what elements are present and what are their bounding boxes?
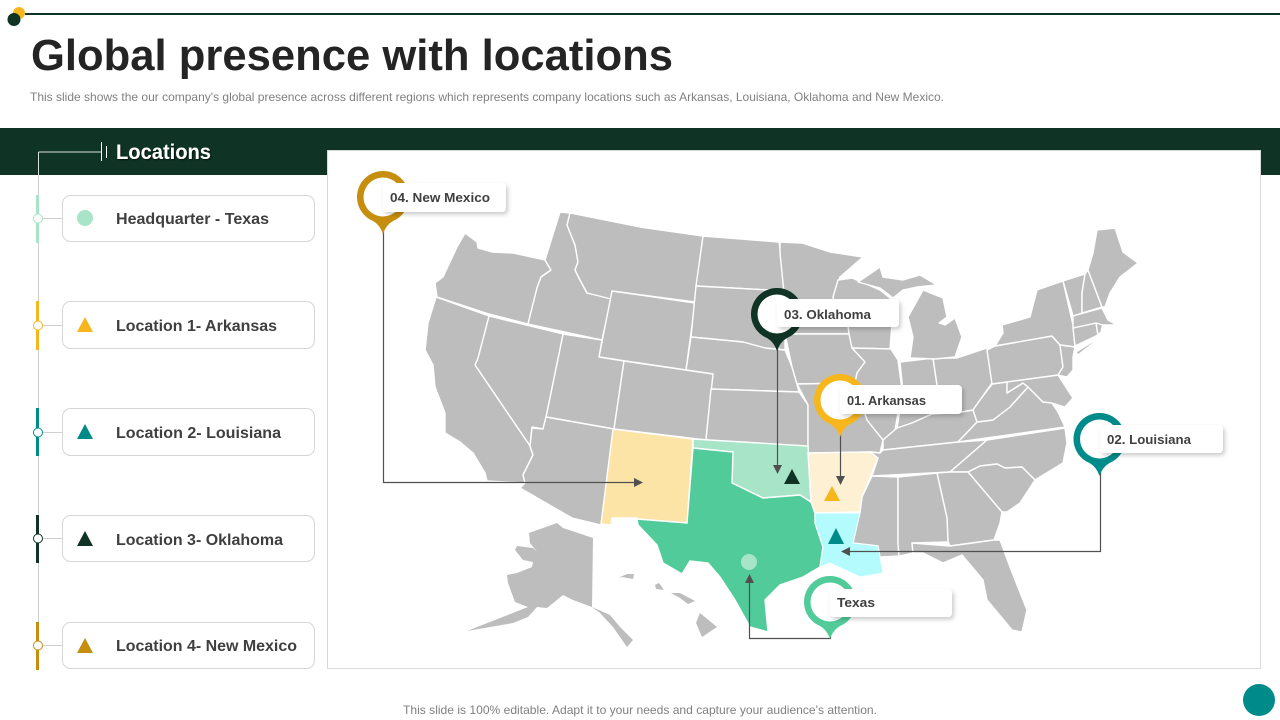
state: Louisiana [815, 513, 883, 577]
Tennessee [870, 440, 987, 476]
Hawaii [696, 613, 717, 637]
callout: Texas: Texas [837, 595, 875, 610]
arrow: Texas [745, 574, 830, 638]
marker: Louisiana triangle [828, 528, 844, 544]
legend heading: Locations [116, 141, 211, 164]
legend trunk line and bracket [38, 142, 106, 646]
state: Oklahoma [693, 439, 811, 502]
state: Texas [637, 448, 823, 632]
subtitle: This slide shows the our company's global presence across different regions which represents company locations such as Arkansas, Louisiana, Oklahoma and New Mexico. [30, 90, 944, 104]
title: Global presence with locations [31, 31, 673, 80]
legend item: Location 4 [34, 622, 314, 670]
WA and OR [435, 233, 551, 324]
callout: Texas [804, 576, 952, 639]
Alaska panhandle [592, 607, 633, 647]
arrow: Louisiana [841, 472, 1100, 556]
marker: Oklahoma triangle [784, 469, 800, 484]
corner circle [1243, 684, 1275, 716]
arrow: New Mexico [384, 230, 643, 487]
legend item: Location 2: Location 2- Louisiana [116, 425, 281, 442]
callout: 04 New Mexico: 04. New Mexico [390, 190, 490, 205]
top decoration: dots and rule [8, 7, 1280, 26]
footer note: This slide is 100% editable. Adapt it to your needs and capture your audience's attention. [403, 703, 877, 717]
legend item: Headquarter [34, 195, 314, 243]
state: New Mexico [601, 429, 693, 525]
US map [425, 212, 1138, 647]
legend item: Location 1 [34, 301, 314, 350]
callout: 01 Arkansas: 01. Arkansas [847, 393, 926, 408]
marker: Texas headquarter circle [741, 554, 757, 570]
callout: 03 Oklahoma: 03. Oklahoma [784, 307, 872, 322]
legend item: Location 3 [34, 515, 314, 563]
map panel [328, 150, 1260, 668]
callout: 01 Arkansas [814, 374, 962, 437]
arrow: Oklahoma [773, 345, 782, 474]
state: Arkansas [808, 452, 878, 513]
header band [0, 128, 1280, 175]
legend item: Location 4: Location 4- New Mexico [116, 638, 297, 655]
callout: 04 New Mexico [357, 171, 506, 234]
legend item: Location 1: Location 1- Arkansas [116, 318, 277, 335]
legend item: Location 2 [34, 408, 314, 456]
callout: 02 Louisiana: 02. Louisiana [1107, 432, 1192, 447]
callout: 03 Oklahoma [751, 288, 899, 351]
legend item: Location 3: Location 3- Oklahoma [116, 532, 283, 549]
arrow: Arkansas [836, 433, 845, 485]
legend item: Headquarter: Headquarter - Texas [116, 211, 269, 228]
Alaska [467, 523, 593, 631]
callout: 02 Louisiana [1074, 413, 1223, 476]
marker: Arkansas triangle [824, 486, 840, 501]
